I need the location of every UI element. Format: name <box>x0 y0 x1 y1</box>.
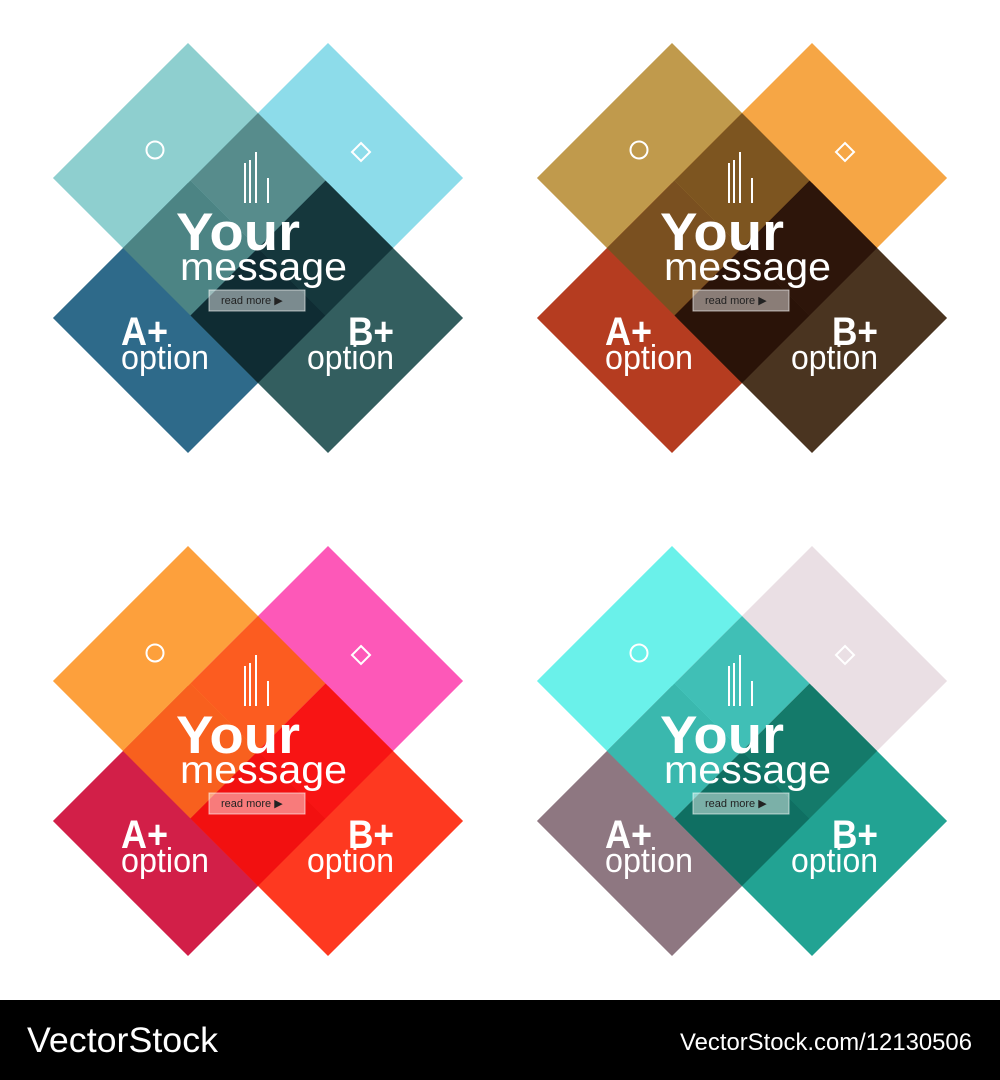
panel: cyan group <box>467 476 1000 1026</box>
panel: teal group <box>0 0 533 523</box>
footer bar <box>0 1000 1000 1080</box>
panel: red group <box>0 476 533 1026</box>
panel: brown group <box>467 0 1000 523</box>
footer bar: VectorStock <box>27 1021 219 1060</box>
footer bar: VectorStock.com/12130506 <box>680 1029 972 1056</box>
